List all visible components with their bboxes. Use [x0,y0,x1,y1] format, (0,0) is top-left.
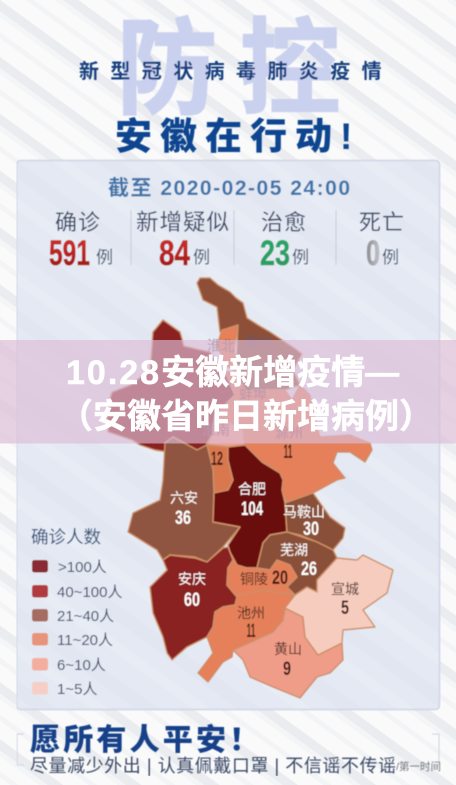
map labels: 安庆 [178,571,206,587]
stat: deaths [359,210,405,273]
stat: deaths: 死亡 [359,210,405,235]
legend [31,527,122,698]
region: Wuhu [257,532,337,595]
stat: new suspected: 新增疑似 [136,210,230,235]
legend: 21~40人 [57,608,114,625]
stat: new suspected: 例 [193,248,210,267]
watermark heading: 防控: 控 [240,12,340,128]
region: Xuancheng [285,555,393,655]
region: Chizhou [198,590,295,682]
region: Chuzhou [243,385,372,503]
region: Hefei [213,445,287,568]
region: Suzhou [197,278,302,390]
map labels: 蚌埠 [239,386,267,402]
map numbers: 11 [246,621,256,642]
region: Fuyang [106,320,235,452]
map labels: 黄山 [274,641,302,657]
stat: deaths: 0 [366,234,380,273]
region: Huainan north [207,415,245,447]
stat: cured [260,210,309,273]
banner [0,340,456,444]
map numbers: 5 [341,598,349,619]
map labels: 六安 [170,490,198,506]
map labels [170,334,359,657]
legend: 1~5人 [57,681,97,698]
map numbers: 9 [283,659,291,680]
region: Huaibei [217,325,238,372]
panel: main card [16,160,440,710]
map labels: 宣城 [331,581,359,597]
map numbers: 20 [272,568,288,589]
map labels: 池州 [237,605,265,621]
watermark heading: 防控 [117,12,340,128]
main title: 安徽在行动! [115,116,360,157]
map labels: 宿州 [244,334,272,350]
map labels: 铜陵 [240,571,268,587]
date line: 截至 2020-02-05 24:00 [108,177,350,200]
stat: confirmed: 591 [49,234,90,273]
map numbers: 12 [211,449,223,470]
footer heading: 愿所有人平安！ [30,724,262,757]
region: Tongling [227,560,297,597]
stat: new suspected: 84 [159,234,190,273]
map numbers: 60 [184,590,200,611]
stat: confirmed: 确诊 [55,210,101,235]
stat: cured: 例 [292,248,309,267]
map numbers: 26 [301,559,317,580]
legend: 6~10人 [57,657,106,674]
map numbers [175,442,349,680]
subtitle: 新型冠状病毒肺炎疫情 [79,59,393,83]
watermark heading: 防控: 防 [117,12,217,128]
map numbers: 11 [284,442,293,463]
stat: cured: 23 [260,234,290,273]
map labels: 淮北 [207,338,235,354]
map labels: 滁州 [275,425,303,441]
map labels: 合肥 [238,481,266,497]
map labels: 马鞍山 [283,504,325,520]
map numbers: 104 [241,499,263,520]
legend: 40~100人 [57,584,122,601]
region: Liu'an [128,437,240,562]
map numbers: 30 [303,519,319,540]
stat: cured: 治愈 [261,210,307,235]
footer advice: 尽量减少外出 | 认真佩戴口罩 | 不信谣不传谣 [30,756,396,776]
legend: >100人 [58,559,107,576]
source watermark: /第一时间 [396,760,441,773]
banner title line 2: （安徽省昨日新增病例） [59,398,433,436]
region: Bengbu [215,372,292,425]
stat: deaths: 例 [382,248,399,267]
legend: 11~20人 [57,632,113,649]
map labels: 淮南 [202,422,230,438]
map numbers: 36 [175,508,191,529]
stat: new suspected [136,210,230,273]
stat: confirmed: 例 [96,248,113,267]
footer bracket [17,734,439,765]
stat: confirmed [49,210,113,273]
map labels: 芜湖 [280,542,308,558]
region: Anqing [150,547,237,660]
map of Anhui [106,278,393,698]
banner title line 1: 10.28安徽新增疫情— [66,354,399,392]
region: Huangshan [233,608,343,698]
region: Maanshan [285,493,345,550]
region: Huainan [207,445,233,493]
legend: 确诊人数 [31,527,101,547]
